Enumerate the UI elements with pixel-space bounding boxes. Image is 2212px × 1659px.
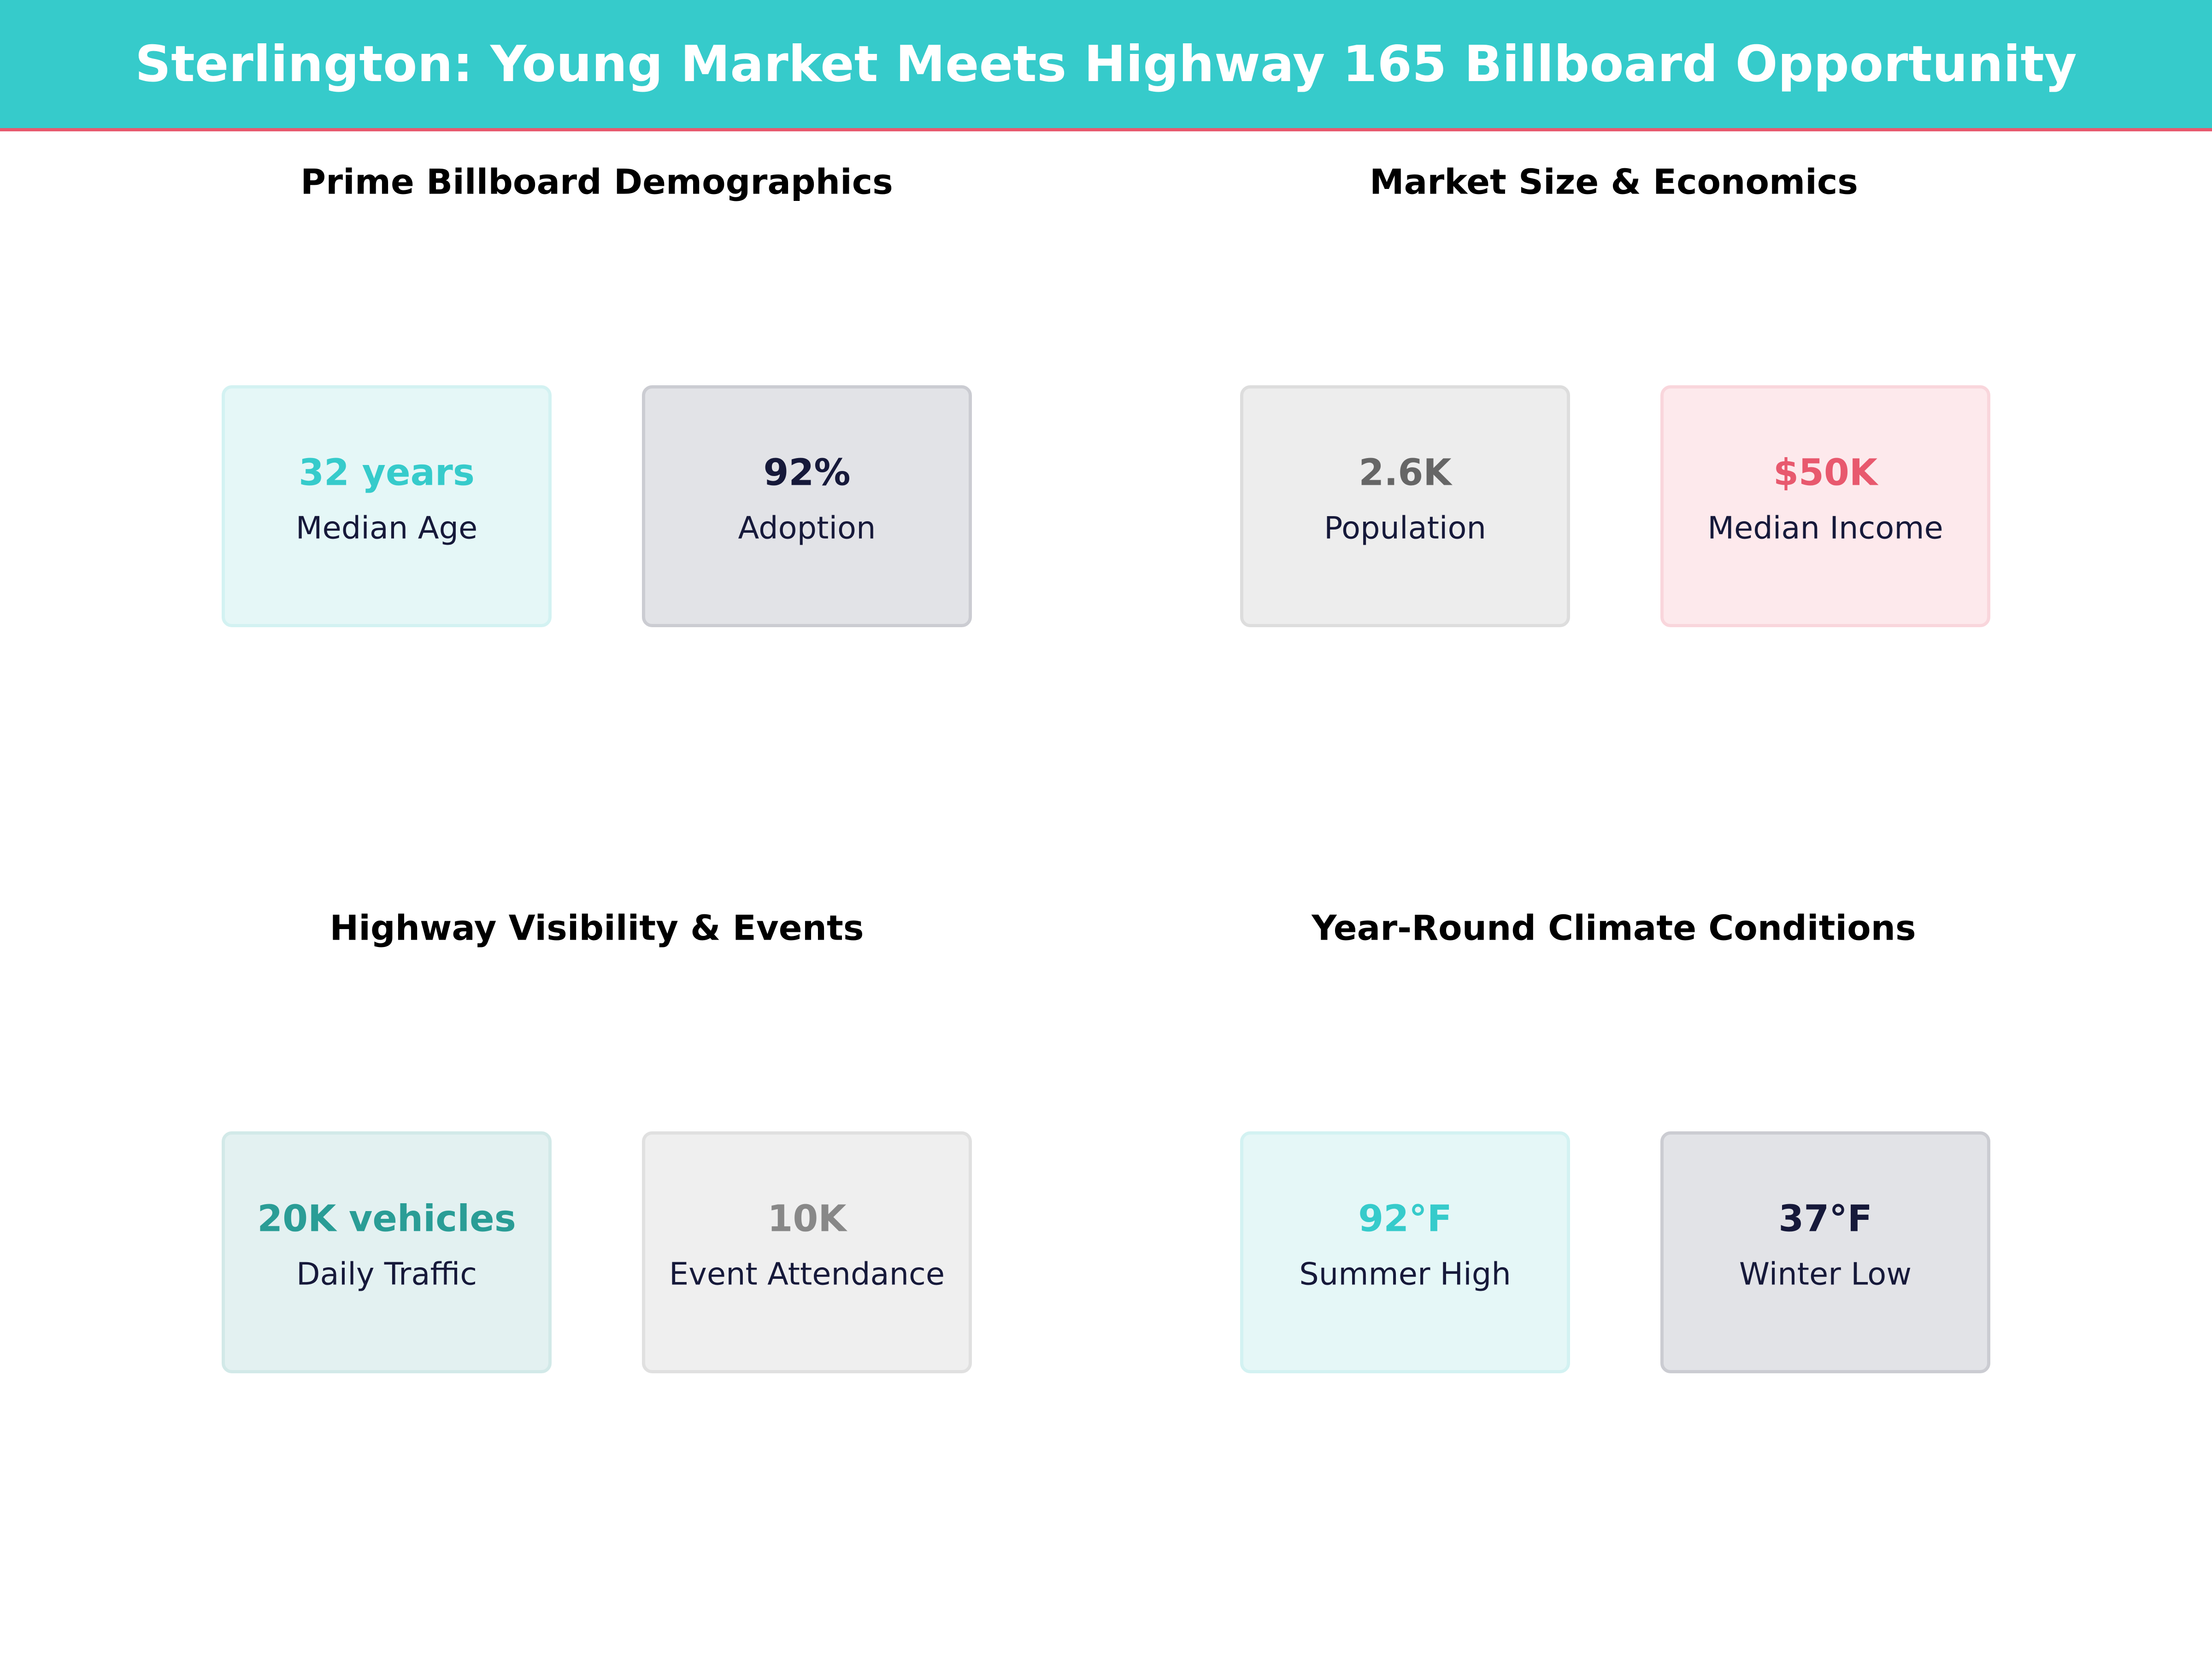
card: summer high: Summer High: [1299, 1256, 1511, 1292]
card: winter low: 37°F: [1778, 1197, 1872, 1240]
card: median age: [222, 385, 552, 627]
card: adoption: [642, 385, 972, 627]
card: winter low: [1660, 1131, 1990, 1373]
card: winter low: Winter Low: [1739, 1256, 1912, 1292]
heading: Market Size & Economics: Market Size & Economics: [1370, 161, 1858, 202]
card: event attendance: [642, 1131, 972, 1373]
card: median age: Median Age: [296, 510, 477, 546]
card: event attendance: Event Attendance: [669, 1256, 945, 1292]
card: population: 2.6K: [1359, 452, 1452, 494]
card: median income: Median Income: [1707, 510, 1943, 546]
card: event attendance: 10K: [767, 1197, 847, 1240]
card: daily traffic: Daily Traffic: [296, 1256, 477, 1292]
header banner: [0, 0, 2212, 131]
card: population: [1240, 385, 1570, 627]
card: adoption: 92%: [763, 452, 851, 494]
card: median income: $50K: [1773, 452, 1877, 494]
card: summer high: [1240, 1131, 1570, 1373]
card: daily traffic: [222, 1131, 552, 1373]
card: summer high: 92°F: [1358, 1197, 1452, 1240]
card: population: Population: [1324, 510, 1486, 546]
card: median age: 32 years: [299, 452, 475, 494]
heading: Year-Round Climate Conditions: Year-Round Climate Conditions: [1312, 908, 1916, 948]
card: adoption: Adoption: [738, 510, 876, 546]
heading: Highway Visibility & Events: Highway Visibility & Events: [330, 908, 864, 948]
title: Sterlington: Young Market Meets Highway 165 Billboard Opportunity: [135, 35, 2077, 93]
card: median income: [1660, 385, 1990, 627]
card: daily traffic: 20K vehicles: [257, 1197, 516, 1240]
heading: Prime Billboard Demographics: Prime Billboard Demographics: [300, 161, 893, 202]
